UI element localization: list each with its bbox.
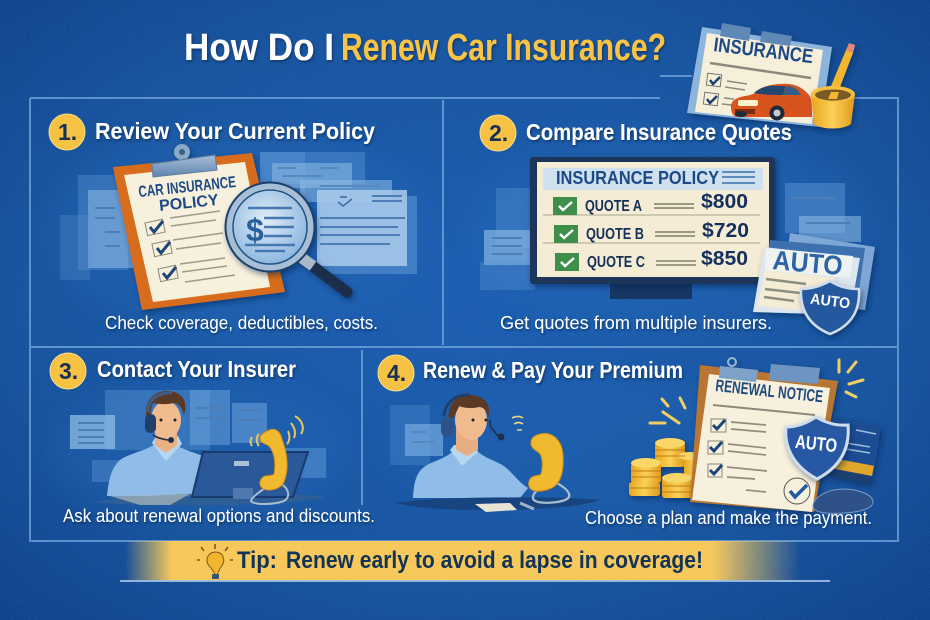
icon: light bulb xyxy=(197,544,233,579)
quote rows: QUOTE B xyxy=(586,226,644,243)
illustration: insurance clipboard, car and pencil cup xyxy=(687,23,855,128)
clipboard: INSURANCE xyxy=(712,34,814,68)
clipboard: car insurance policy: CAR INSURANCE xyxy=(138,174,237,201)
monitor with quotes xyxy=(530,157,775,299)
faded background documents xyxy=(480,183,861,290)
clipboard xyxy=(687,23,832,127)
faded background documents xyxy=(60,152,417,280)
clipboard: car insurance policy xyxy=(113,144,285,310)
car xyxy=(731,84,812,120)
quote rows: $850 xyxy=(701,248,748,270)
step 4 heading: Renew & Pay Your Premium xyxy=(423,357,683,383)
tip text: Tip: xyxy=(237,547,277,574)
step 1 description: Check coverage, deductibles, costs. xyxy=(105,312,378,333)
screen heading: INSURANCE POLICY xyxy=(556,168,719,188)
step 2 heading: Compare Insurance Quotes xyxy=(526,119,792,145)
title: Renew Car Insurance? xyxy=(341,27,666,69)
step 4 description: Choose a plan and make the payment. xyxy=(585,507,872,528)
magnifying glass xyxy=(226,183,347,292)
step 2 heading: 2. xyxy=(489,120,508,146)
step 1 heading: 1. xyxy=(58,119,77,145)
shield: AUTO xyxy=(809,291,851,312)
title xyxy=(184,27,666,69)
quote rows: $720 xyxy=(702,220,749,242)
panel frame and dividers xyxy=(30,76,898,541)
step 2 description: Get quotes from multiple insurers. xyxy=(500,312,772,333)
ringing phone xyxy=(250,416,303,504)
step 1 heading: Review Your Current Policy xyxy=(95,118,375,144)
telephone xyxy=(529,433,569,503)
panel 1: review your current policy xyxy=(49,114,417,333)
agent with headset xyxy=(413,395,528,498)
panel 3: contact your insurer xyxy=(50,353,375,526)
title: How Do I xyxy=(184,27,334,69)
renewal notice clipboard xyxy=(690,358,838,512)
quote rows: $800 xyxy=(701,191,748,213)
step 3 heading: Contact Your Insurer xyxy=(97,356,296,382)
payment card xyxy=(828,417,881,484)
tip banner xyxy=(120,541,830,581)
step 3 heading xyxy=(50,353,296,389)
magnifying glass: $ xyxy=(246,212,264,248)
auto policy papers and shield xyxy=(753,233,875,334)
panel 2: compare insurance quotes xyxy=(480,115,875,334)
faded background document xyxy=(390,405,443,465)
faded background documents xyxy=(70,390,326,482)
pencil and cup xyxy=(811,43,855,128)
step 1 heading xyxy=(49,114,375,150)
shield xyxy=(786,417,848,479)
desk and computer monitor xyxy=(95,452,325,505)
panel 4: renew and pay your premium xyxy=(378,355,881,528)
quote rows xyxy=(553,191,749,271)
renewal notice clipboard: RENEWAL NOTICE xyxy=(715,376,824,406)
step 3 description: Ask about renewal options and discounts. xyxy=(63,505,375,526)
step 3 heading: 3. xyxy=(59,358,78,384)
quote rows: QUOTE C xyxy=(587,254,645,271)
step 4 heading xyxy=(378,355,683,391)
tip text: Renew early to avoid a lapse in coverage! xyxy=(286,547,703,574)
sparkles xyxy=(650,360,863,423)
agent with headset xyxy=(107,391,209,496)
quote rows: QUOTE A xyxy=(585,198,642,215)
step 4 heading: 4. xyxy=(387,360,406,386)
desk xyxy=(395,497,600,512)
shield: AUTO xyxy=(794,432,838,457)
auto policy papers and shield: AUTO xyxy=(771,245,844,281)
step 2 heading xyxy=(480,115,792,151)
coin stacks xyxy=(629,438,702,498)
clipboard: car insurance policy: POLICY xyxy=(158,192,220,215)
mouse xyxy=(813,489,873,513)
